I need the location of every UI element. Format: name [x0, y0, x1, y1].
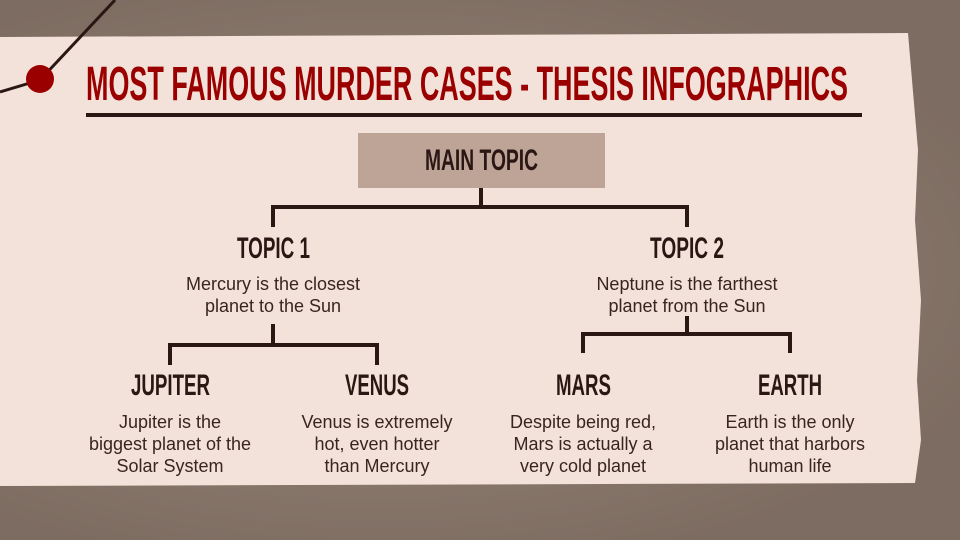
topic 2 text: [596, 274, 778, 316]
jupiter: JUPITER: [131, 369, 210, 402]
mars text: Mars is actually a: [513, 434, 653, 454]
venus text: than Mercury: [324, 456, 430, 476]
mars text: very cold planet: [520, 456, 646, 476]
jupiter text: [89, 412, 251, 476]
topic 1: TOPIC 1: [237, 232, 310, 265]
earth: EARTH: [758, 369, 822, 402]
topic 2 text: planet from the Sun: [608, 296, 766, 316]
topic 2 text: Neptune is the farthest: [596, 274, 778, 294]
earth text: Earth is the only: [725, 412, 855, 432]
mars text: Despite being red,: [510, 412, 656, 432]
jupiter text: Jupiter is the: [119, 412, 221, 432]
main topic box: [358, 133, 605, 188]
title underline: [86, 113, 862, 117]
mars text: [510, 412, 656, 476]
main topic label: MAIN TOPIC: [425, 144, 538, 177]
jupiter text: biggest planet of the: [89, 434, 251, 454]
earth text: planet that harbors: [715, 434, 865, 454]
venus text: Venus is extremely: [301, 412, 453, 432]
mars: MARS: [556, 369, 611, 402]
connectors: [168, 188, 792, 365]
jupiter text: Solar System: [116, 456, 224, 476]
venus text: hot, even hotter: [314, 434, 440, 454]
topic 1 text: [186, 274, 360, 316]
venus text: [301, 412, 453, 476]
earth text: human life: [748, 456, 832, 476]
topic 1 text: planet to the Sun: [205, 296, 341, 316]
venus: VENUS: [345, 369, 409, 402]
topic 2: TOPIC 2: [650, 232, 724, 265]
earth text: [715, 412, 865, 476]
topic 1 text: Mercury is the closest: [186, 274, 360, 294]
